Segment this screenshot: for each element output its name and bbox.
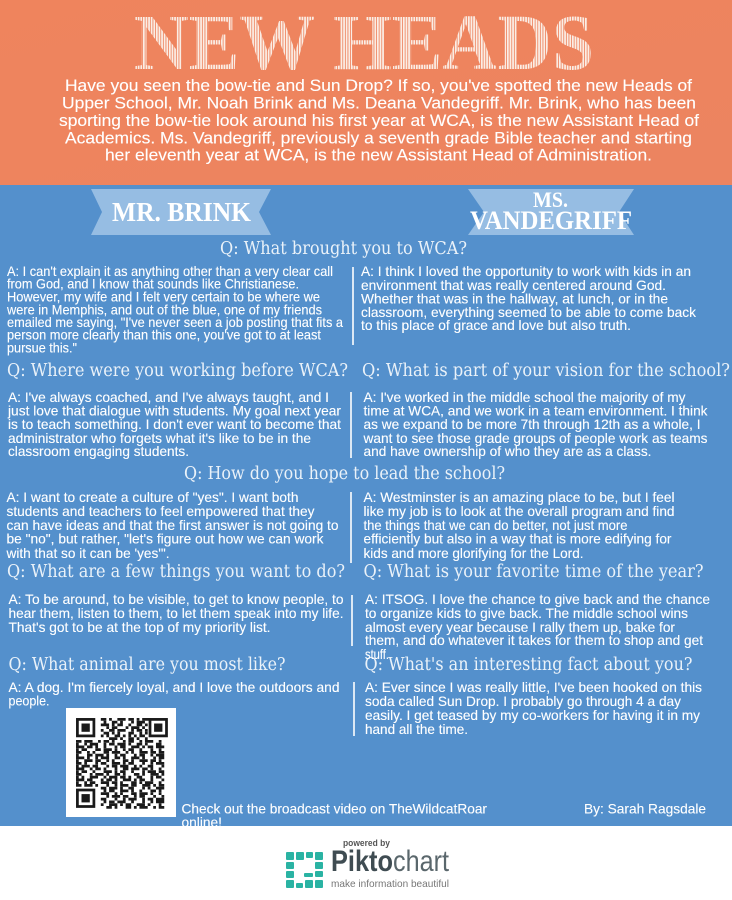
question: where were you working: Q: Where were you working before WCA? [7, 361, 348, 381]
icon: Piktochart logo [286, 852, 323, 888]
answer: Brink on WCA [6, 264, 343, 356]
answer: Brink on WCA: pursue this." [7, 340, 77, 356]
header panel [0, 0, 732, 185]
answer: Vandegriff on favorite time: A: ITSOG. I love the chance to give back and the chance [365, 592, 710, 607]
answer: Vandegriff on vision: time at WCA, and we work in a team environment. I think [364, 404, 708, 418]
banner: Ms. Vandegriff: MS. [533, 187, 568, 212]
answer: Vandegriff on leading [364, 490, 674, 561]
answer: Vandegriff on leading: efficiently but also in a way that is more edifying for [364, 532, 672, 546]
answer: Vandegriff on WCA [361, 264, 696, 333]
broadcast note: Check out the broadcast video on TheWildcatRoar [182, 802, 487, 816]
answer: Vandegriff on fact: A: Ever since I was really little, I've been hooked on this [365, 680, 702, 695]
answer: Vandegriff on leading: A: Westminster is an amazing place to be, but I feel [364, 490, 674, 505]
answer: Vandegriff on leading: kids and more glorifying for the Lord. [364, 546, 584, 561]
banner: Ms. Vandegriff [468, 187, 634, 235]
answer: Brink on priorities [8, 592, 344, 635]
answer: Vandegriff on fact: soda called Sun Drop. I probably go through 4 a day [365, 694, 681, 709]
answer: Vandegriff on vision: as we expand to be more 7th through 12th as a whole, I [364, 417, 700, 432]
answer: Brink on priorities: A: To be around, to be visible, to get to know people, to [8, 592, 344, 607]
answer: Vandegriff on WCA: A: I think I loved the opportunity to work with kids in an [361, 264, 691, 279]
wordmark [331, 845, 450, 878]
answer: Vandegriff on favorite time: stuff. [365, 647, 389, 662]
tagline: make information beautiful [331, 878, 449, 890]
answer: Vandegriff on WCA: environment that was really centered around God. [361, 278, 666, 293]
answer: Brink on priorities: That's got to be at the top of my priority list. [8, 620, 270, 635]
answer: Brink on WCA: A: I can't explain it as anything other than a very clear call [7, 264, 333, 279]
question: animal: Q: What animal are you most like? [8, 655, 286, 675]
QR code [66, 708, 176, 817]
powered by: powered by [343, 838, 391, 849]
question: favorite time of year: Q: What is your favorite time of the year? [364, 562, 704, 582]
answer: Brink on animal [8, 680, 340, 708]
answer: Brink on leading: with that so it can be 'yes'". [5, 546, 169, 561]
intro text: Have you seen the bow-tie and Sun Drop? If so, you've spotted the new Heads of [65, 77, 692, 95]
answer: Brink on previous work: administrator who forgets what it's like to be in the [8, 431, 311, 446]
answer: Brink on WCA: However, my wife and I felt very certain to be where we [7, 290, 320, 304]
banner: Ms. Vandegriff: VANDEGRIFF [470, 206, 632, 235]
answer: Brink on leading: be "no", but rather, "let's figure out how we can work [6, 532, 324, 546]
intro text: Academics. Ms. Vandegriff, previously a seventh grade Bible teacher and starting [65, 130, 692, 148]
question: things you want to do: Q: What are a few things you want to do? [7, 562, 345, 582]
intro text: her eleventh year at WCA, is the new Assistant Head of Administration. [105, 146, 652, 164]
answer: Brink on previous work: A: I've always coached, and I've always taught, and I [8, 390, 329, 405]
answer: Brink on WCA: emailed me saying, "I've never seen a job posting that fits a [7, 315, 343, 330]
answer: Brink on WCA: person more clearly than this one, you've got to at least [7, 328, 321, 342]
answer: Brink on leading: A: I want to create a culture of "yes". I want both [6, 490, 298, 505]
banner: Mr. Brink: MR. BRINK [112, 197, 251, 227]
answer: Vandegriff on favorite time: almost every year because I rally them up, bake for [365, 620, 675, 635]
banner: Mr. Brink [91, 189, 271, 235]
answer: Vandegriff on fact: hand all the time. [365, 722, 468, 737]
answer: Vandegriff on favorite time: them, and do whatever it takes for them to shop and get [365, 633, 703, 648]
wordmark: Pikto [331, 845, 393, 878]
answer: Vandegriff on leading: the things that we can do better, not just more [364, 518, 628, 533]
broadcast note [182, 804, 487, 826]
broadcast note: online! [182, 815, 222, 830]
answer: Vandegriff on favorite time [365, 592, 710, 662]
answer: Vandegriff on favorite time: to organize kids to give back. The middle school wins [365, 606, 688, 621]
question: interesting fact: Q: What's an interesting fact about you? [364, 655, 692, 675]
answer: Vandegriff on vision: and have ownership of who they are as a class. [364, 444, 652, 459]
answer: Brink on previous work: is to teach something. I don't ever want to become that [8, 417, 341, 432]
wordmark: chart [393, 845, 450, 878]
answer: Vandegriff on WCA: Whether that was in the hallway, at lunch, or in the [361, 292, 668, 306]
answer: Brink on animal: people. [8, 694, 50, 708]
answer: Brink on leading: can have ideas and that the first answer is not going to [6, 518, 338, 533]
answer: Vandegriff on vision [362, 390, 708, 459]
intro text: sporting the bow-tie look around his first year at WCA, is the new Assistant Head of [59, 112, 699, 130]
answer: Brink on priorities: hear them, listen to them, to let them speak into my life. [8, 606, 344, 621]
answer: Brink on previous work: just love that dialogue with students. My goal next year [7, 404, 341, 418]
answer: Brink on WCA: were in Memphis, and out of the blue, one of my friends [6, 302, 322, 318]
blue interview panel [0, 185, 732, 830]
answer: Vandegriff on fact [365, 680, 702, 737]
question: how do you hope to lead: Q: How do you hope to lead the school? [184, 464, 505, 484]
answer: Brink on WCA: from God, and I know that sounds like Christianese. [7, 276, 299, 292]
intro text: Upper School, Mr. Noah Brink and Ms. Deana Vandegriff. Mr. Brink, who has been [62, 94, 696, 112]
answer: Brink on previous work: classroom engaging students. [8, 444, 189, 459]
intro text [59, 77, 699, 164]
answer: Vandegriff on WCA: to this place of grace and love but also truth. [361, 318, 631, 333]
answer: Vandegriff on leading: like my job is to look at the overall program and find [364, 504, 674, 519]
answer: Vandegriff on fact: easily. I get teased by my co-workers for having it in my [365, 708, 700, 723]
answer: Brink on leading [5, 490, 338, 561]
answer: Vandegriff on WCA: classroom, everything seemed to be able to come back [361, 305, 696, 320]
answer: Brink on leading: students and teachers to feel empowered that they [6, 504, 315, 519]
answer: Brink on previous work [7, 390, 341, 459]
byline: By: Sarah Ragsdale [584, 802, 706, 816]
answer: Vandegriff on vision: A: I've worked in the middle school the majority of my [364, 390, 686, 405]
footer: Piktochart branding [286, 838, 450, 890]
title: NEW HEADS [134, 0, 594, 87]
answer: Brink on animal: A: A dog. I'm fiercely loyal, and I love the outdoors and [8, 680, 340, 695]
question: what brought you: Q: What brought you to WCA? [220, 239, 467, 259]
answer: Vandegriff on vision: want to see those grade groups of people work as teams [362, 431, 708, 446]
